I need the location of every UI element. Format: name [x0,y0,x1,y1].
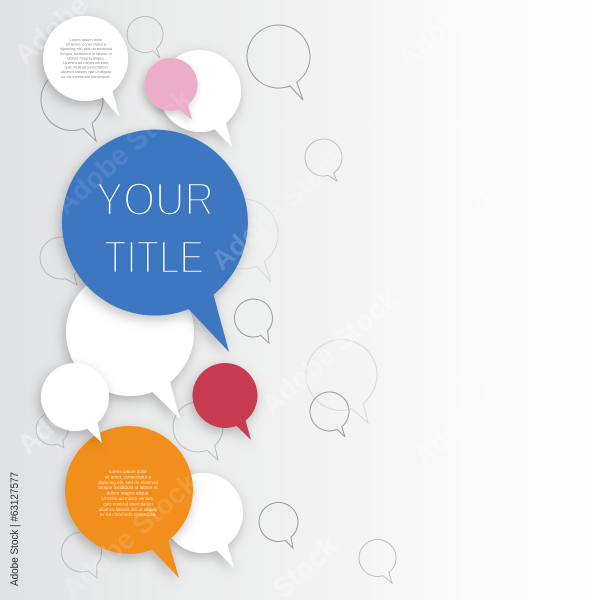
lorem text: orange bubble: Lorem ipsum dolor [109,469,147,474]
title: YOUR: YOUR [96,173,214,225]
watermark: Adobe Stock [407,335,556,472]
outline bubble: right of blue tail [234,299,272,343]
white bubble: large middle [66,268,194,419]
white bubble with lorem text: top left [43,16,128,117]
lorem text: orange bubble: Ut enim ad minim veniam, [101,496,155,501]
white bubble: behind orange [163,473,243,568]
outline bubble: top right [247,25,310,100]
white bubble shape [43,16,128,117]
outline bubble: upper middle [305,139,342,181]
red bubble [193,363,258,440]
faint outline bubble: large center [306,339,377,423]
lorem text: orange bubble: quis nostrud exercitation [103,501,153,506]
lorem text: top-left bubble: quis nostrud exercitation [64,65,108,70]
outline bubble: left of blue title bubble [40,237,82,285]
faint outline bubble: bottom center [359,539,396,583]
orange bubble with lorem text [65,426,193,578]
outline bubble: lower center [259,502,298,548]
lorem text: top-left bubble: ullamco laboris nisi ut aliquip [61,69,112,74]
outline bubble: behind blue title bubble [208,199,278,282]
blue bubble shape [62,130,248,352]
outline bubble: under white top-left bubble [41,69,103,141]
outline bubble: small lower left [36,413,68,448]
lorem text: top-left bubble: Ut enim ad minim veniam, [63,60,109,65]
watermark: Adobe Stock [11,323,160,460]
lorem text: orange bubble: ullamco laboris nisi ut aliquip [99,507,158,512]
outline bubble: behind red bubble [173,402,223,460]
lorem text: top-left bubble: sit amet, consectetur a [66,42,107,47]
lorem text: top-left bubble: dolore magna aliqua. [67,55,105,60]
watermark: Adobe Stock [205,139,354,276]
white bubble: top center [159,50,241,147]
outline bubble: small top [127,16,163,58]
lorem text: orange bubble: dolore magna aliqua. [107,491,149,496]
watermark: Adobe Stock [255,283,404,420]
lorem text: top-left bubble: Lorem ipsum dolor [69,37,103,42]
lorem text: top-left bubble: ex ea commodo consequat. [61,74,111,79]
white bubble: small left [41,363,109,443]
blue title bubble [62,130,248,352]
lorem text: orange bubble: tempor incididunt ut labore et [98,485,158,490]
lorem text: orange bubble: ex ea commodo consequat. [100,512,156,517]
lorem text: orange bubble: sit amet, consectetur a [105,474,152,479]
title: TITLE: TITLE [104,231,204,283]
lorem text: orange bubble: dipiscing elit, sed do eiusmod [98,480,158,485]
lorem text: top-left bubble: tempor incididunt ut labore et [60,51,113,56]
watermark: Adobe Stock [49,83,198,220]
watermark: Adobe Stock [449,93,598,230]
outline bubble: bottom left [61,532,101,578]
outline bubble: center [310,392,349,437]
stock credit text: Adobe Stock | #63127577 [9,472,21,586]
lorem text: top-left bubble: dipiscing elit, sed do eiusmod [60,46,112,51]
orange bubble shape [65,426,193,578]
pink bubble [145,58,198,120]
